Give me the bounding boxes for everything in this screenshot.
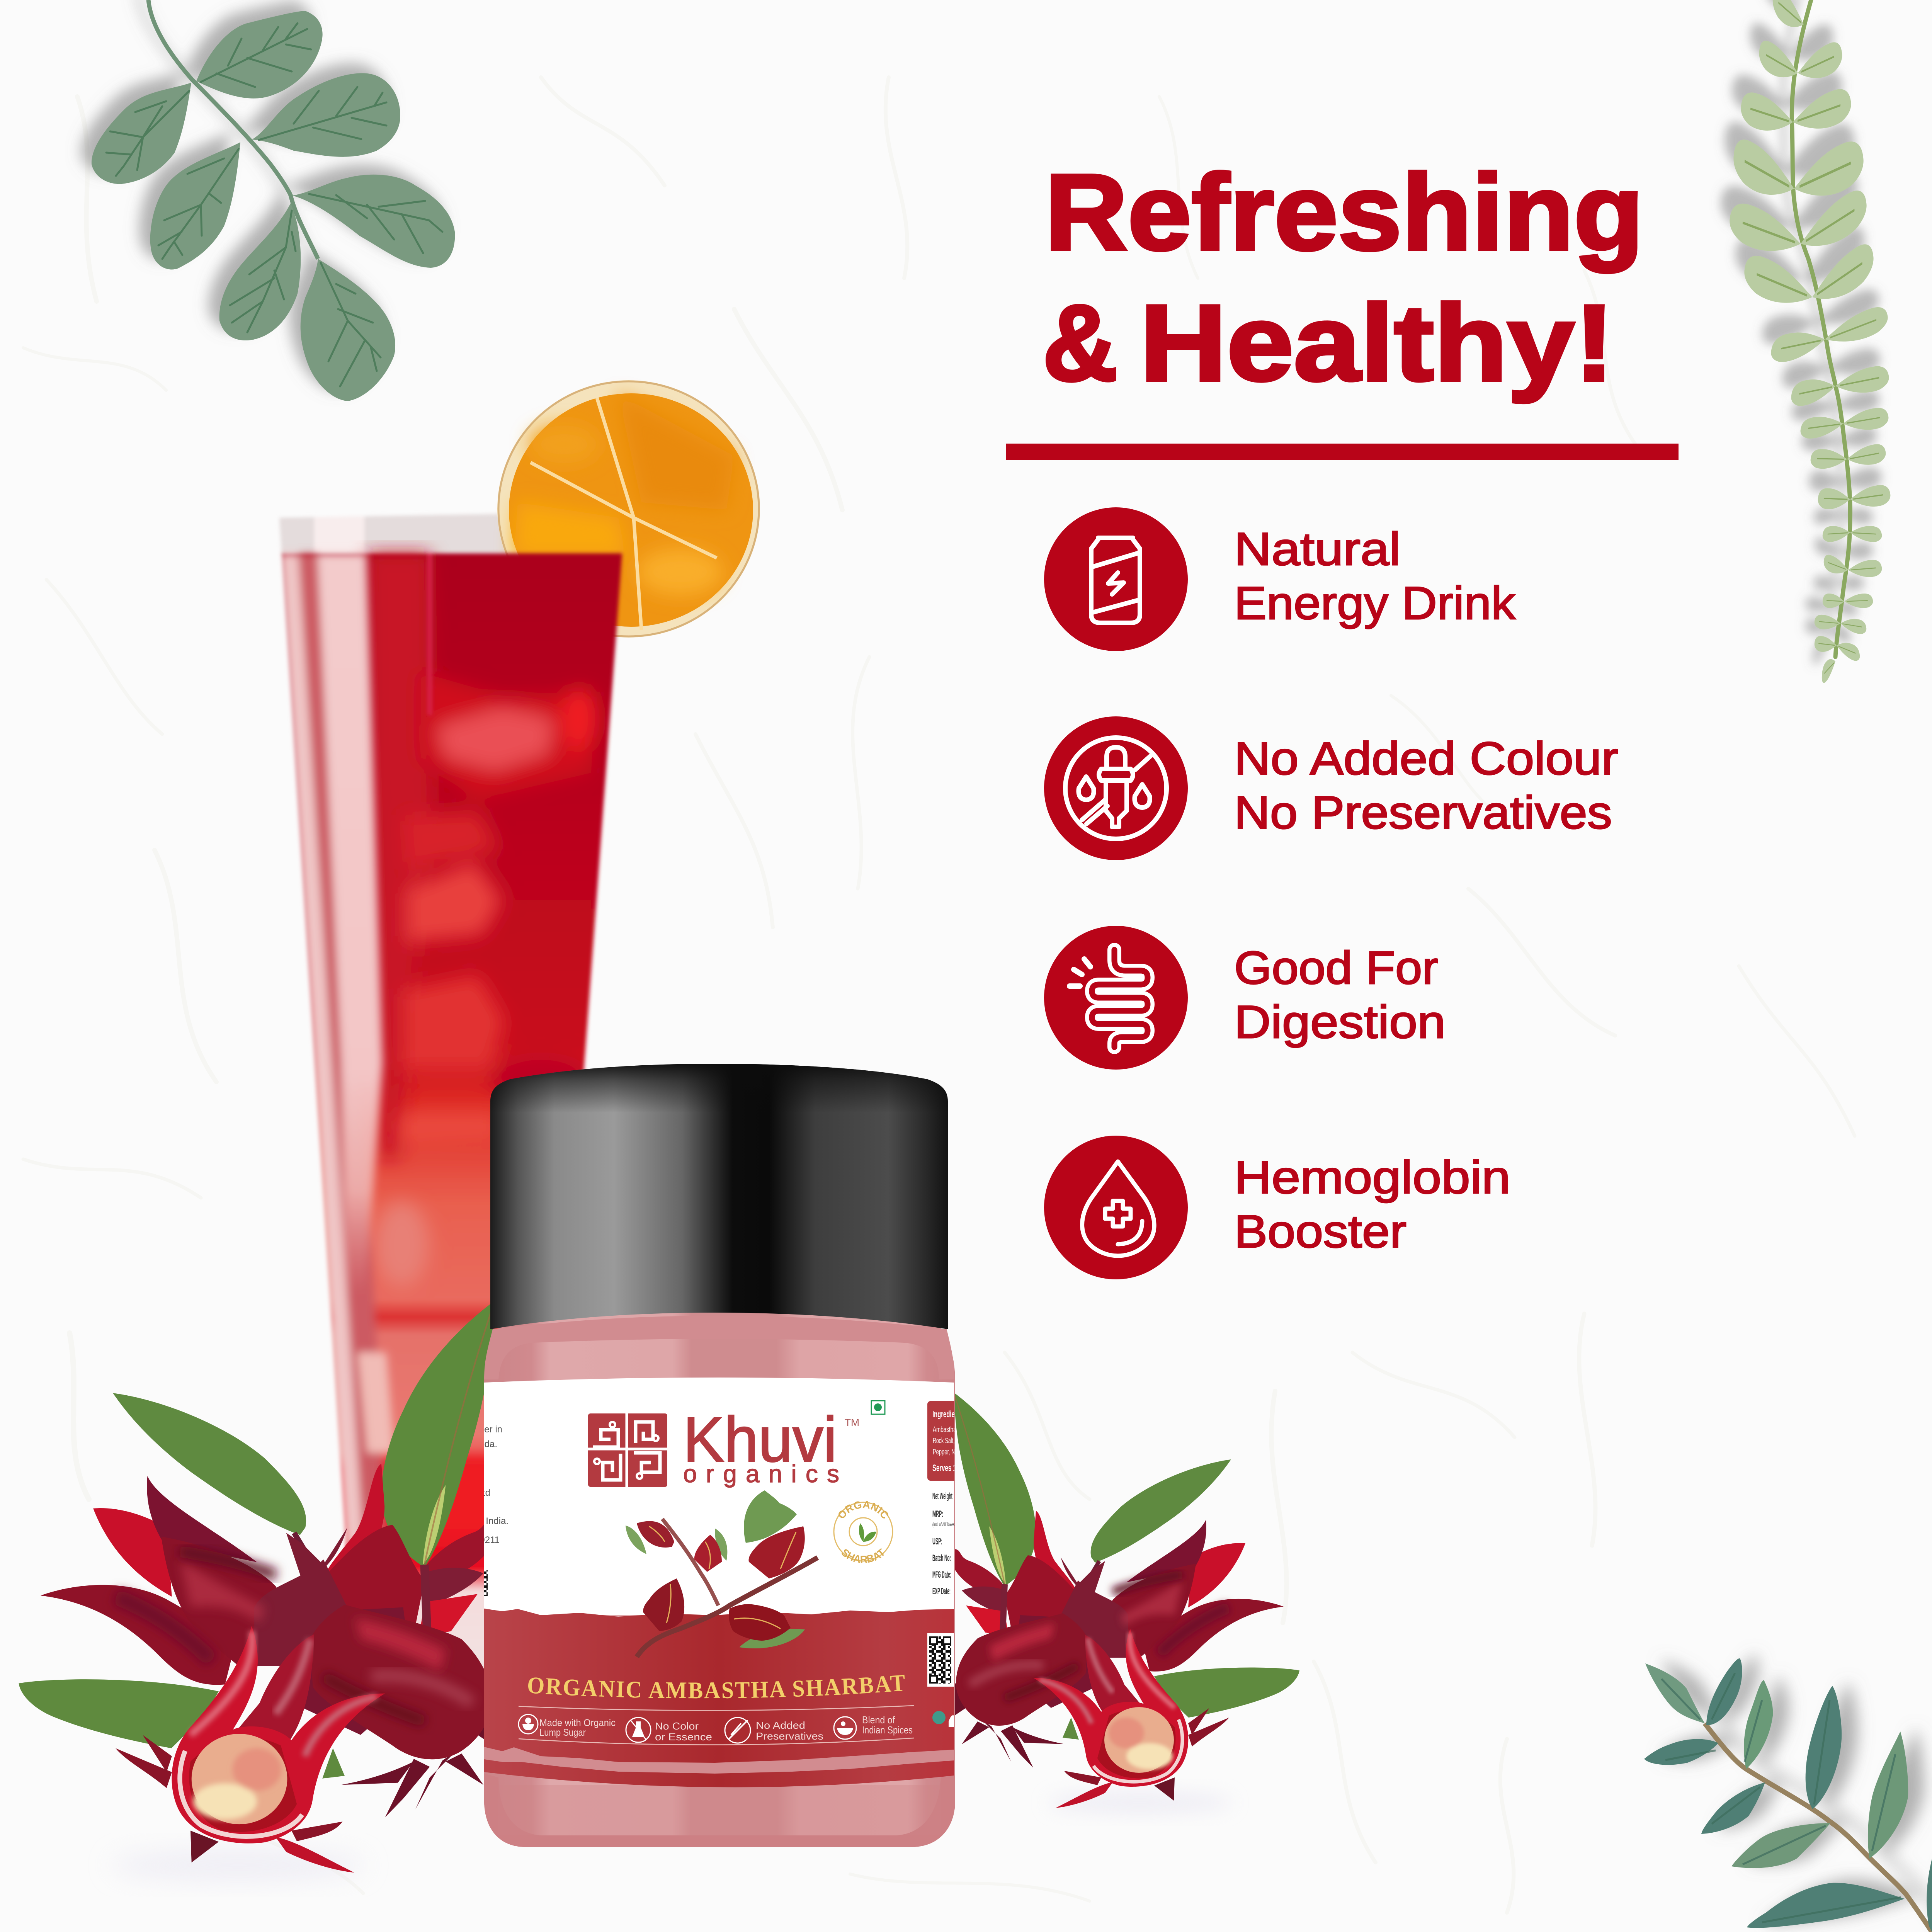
drinking glass rim [278, 513, 505, 554]
label: Hemoglobin [1234, 1151, 1510, 1203]
product name: ORGANIC AMBASTHA SHARBAT [526, 1670, 907, 1704]
claims strip [519, 1706, 914, 1745]
label: Booster [1234, 1206, 1406, 1257]
brighter red left of centre [367, 553, 433, 1159]
title: Healthy! [1140, 283, 1614, 404]
side copy: ingredients box: Net Weight [932, 1491, 952, 1502]
organic sharbat badge: ORGANIC [835, 1498, 891, 1521]
hibiscus roselle cluster: right [954, 1393, 1299, 1814]
certification marks [932, 1711, 954, 1727]
decorative leaf sprig: top left [92, 0, 455, 401]
benefit: hemoglobin booster [1044, 1136, 1510, 1279]
product jar [457, 1064, 975, 1847]
claim: indian spices [834, 1714, 913, 1739]
side copy: ingredients box: Rock Salt, Black [933, 1437, 968, 1445]
side copy: left: 6000211 [464, 1535, 500, 1545]
side copy: ingredients box: Ingredients: [932, 1409, 965, 1420]
side copy: left: ujarat, India. [457, 1516, 509, 1526]
hibiscus roselle cluster: left [19, 1301, 493, 1881]
side copy: ingredients box: EXP Date: [932, 1586, 951, 1597]
label [1234, 523, 1516, 629]
organic sharbat badge: SHARBAT [839, 1546, 888, 1565]
side copy: ingredients box: USP: [932, 1536, 942, 1547]
label [1234, 733, 1618, 838]
side copy: ingredients box: MRP: [932, 1509, 943, 1519]
side copy: left [457, 1424, 509, 1545]
organic sharbat badge [834, 1498, 893, 1565]
QR code [927, 1633, 954, 1687]
label [1234, 1151, 1510, 1257]
decorative fern: top right [1730, 0, 1890, 687]
side copy: left: owder in [467, 1424, 502, 1435]
side copy: ingredients box: Ambastha Powder [933, 1425, 975, 1434]
label [1234, 942, 1446, 1048]
title: Refreshing [1045, 152, 1644, 273]
claim: indian spices: Blend of [862, 1714, 895, 1726]
brand wordmark: Khuvi [683, 1404, 837, 1475]
lower left bud [954, 1613, 1088, 1768]
title underline [1006, 444, 1679, 460]
claim: indian spices: Indian Spices [862, 1724, 913, 1736]
side copy: ingredients box [927, 1401, 975, 1597]
benefit: good for digestion [1044, 926, 1446, 1070]
orange slice garnish [497, 380, 760, 638]
brand wordmark: organics [683, 1460, 839, 1488]
icon: blood drop [1082, 1162, 1154, 1256]
left glass edge shading [279, 553, 394, 1546]
icon: intestine [1070, 950, 1148, 1047]
label: Digestion [1234, 996, 1446, 1048]
claim: no preservatives [725, 1718, 823, 1743]
benefit: natural energy drink [1044, 507, 1516, 651]
label: Good For [1234, 942, 1438, 994]
claim: organic lump sugar: Lump Sugar [539, 1727, 586, 1738]
open flower with seed pod [1033, 1629, 1229, 1808]
side copy: ingredients box: MFG Date: [932, 1570, 951, 1580]
label: Energy Drink [1234, 577, 1516, 629]
veg mark [871, 1401, 885, 1414]
claim: no preservatives: Preservatives [756, 1730, 823, 1742]
label: No Added Colour [1234, 733, 1618, 784]
jar cap [490, 1064, 948, 1329]
barcode stub [484, 1570, 488, 1596]
side copy: ingredients box: Batch No: [932, 1553, 951, 1563]
jar body [484, 1310, 955, 1847]
title [1043, 152, 1644, 404]
brand logo mark [588, 1413, 667, 1487]
brand wordmark: TM [845, 1417, 859, 1428]
icon: crossed dropper [1065, 738, 1167, 839]
label white area [457, 1378, 975, 1615]
upper bud [1059, 1520, 1284, 1672]
decorative leaf sprig: bottom right [1644, 1658, 1932, 1932]
title: & [1043, 283, 1118, 403]
side copy: ingredients box: (Incl of All Taxes) [932, 1521, 956, 1527]
ice cubes [375, 672, 597, 1538]
label red band [484, 1609, 954, 1787]
label botanical illustration [626, 1490, 818, 1657]
benefit: no added colour [1044, 716, 1618, 860]
claim: no preservatives: No Added [756, 1719, 805, 1731]
claim: no color: or Essence [655, 1731, 712, 1743]
green leaves [954, 1393, 1299, 1740]
claim: organic lump sugar: Made with Organic [539, 1718, 616, 1728]
side copy: left: Ltd [478, 1488, 490, 1498]
side copy: left: or soda. [464, 1439, 497, 1449]
claim: no color [626, 1718, 712, 1743]
side copy: ingredients box: Pepper, Natural [933, 1448, 968, 1456]
icon: energy can [1091, 538, 1140, 623]
label: No Preservatives [1234, 787, 1612, 838]
claim: no color: No Color [655, 1720, 699, 1732]
claim: organic lump sugar [519, 1714, 616, 1738]
side copy: ingredients box: Serves 12 [932, 1463, 959, 1473]
glass liquid and ice [279, 540, 625, 1669]
back petals [954, 1511, 1109, 1708]
label: Natural [1234, 523, 1401, 575]
